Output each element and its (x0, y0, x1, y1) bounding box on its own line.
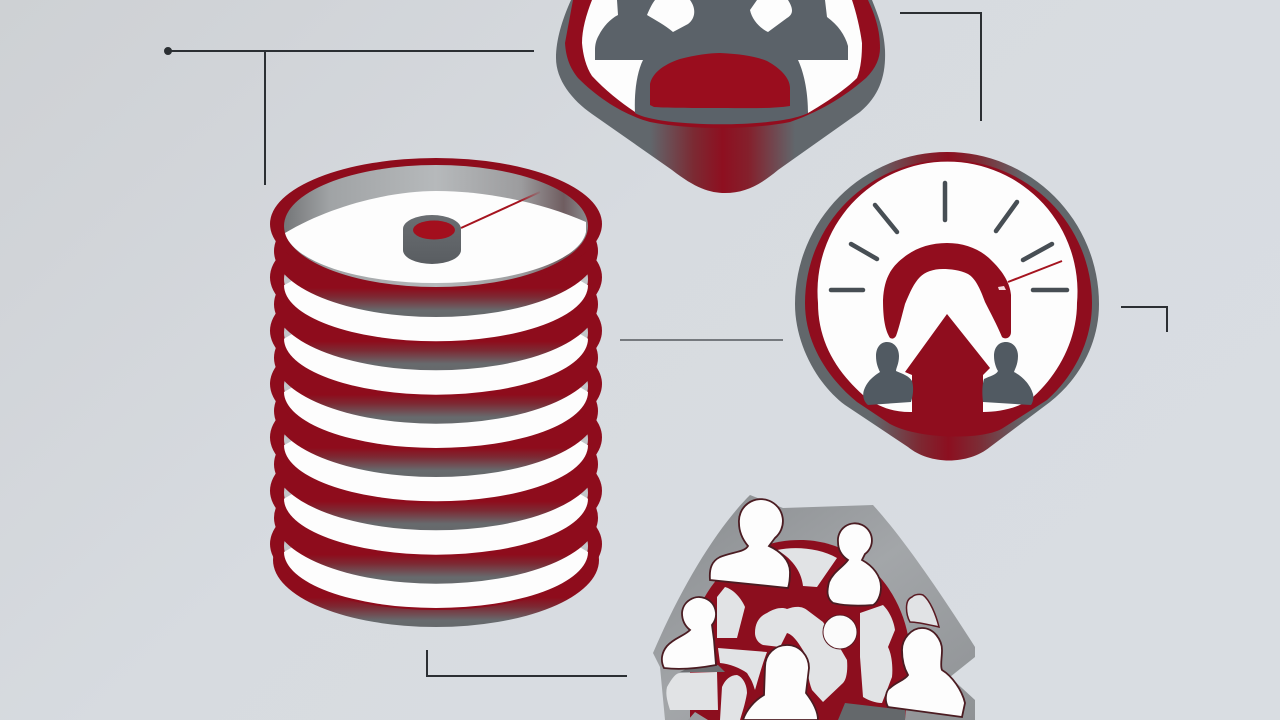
needle (461, 192, 540, 228)
horseshoe arc (883, 243, 1011, 339)
disc 3 (270, 265, 602, 424)
people silhouettes (595, 0, 848, 124)
icon: crowd of people (653, 495, 975, 720)
disc 1 (top) (270, 158, 602, 317)
dark base (838, 703, 905, 720)
connector: bottom bracket (427, 650, 627, 676)
gauge ticks (831, 183, 1067, 290)
connector: stack to gauge (620, 339, 783, 341)
connector: right bracket (1121, 307, 1167, 332)
hub (403, 215, 461, 264)
white gaps between heads (647, 0, 694, 32)
person left (863, 342, 913, 405)
connector: top-right bracket (900, 13, 981, 121)
disc 4 (270, 318, 602, 477)
light shapes (666, 548, 939, 720)
connector: top-left with dot (165, 48, 534, 185)
red ring (690, 540, 910, 720)
red mouth (650, 53, 790, 108)
disc 7 (bottom) (270, 478, 602, 627)
icon: stacked discs (270, 158, 602, 627)
needle (1008, 261, 1062, 282)
people outlined white (662, 499, 965, 720)
disc 2 (270, 211, 602, 370)
icon: gauge with people (795, 152, 1099, 460)
disc 5 (270, 371, 602, 530)
grey hood (653, 495, 975, 720)
arrow (905, 314, 990, 430)
disc 6 (270, 425, 602, 584)
icon: top shield with people (556, 0, 885, 193)
small head (823, 615, 857, 649)
person right (982, 342, 1033, 405)
